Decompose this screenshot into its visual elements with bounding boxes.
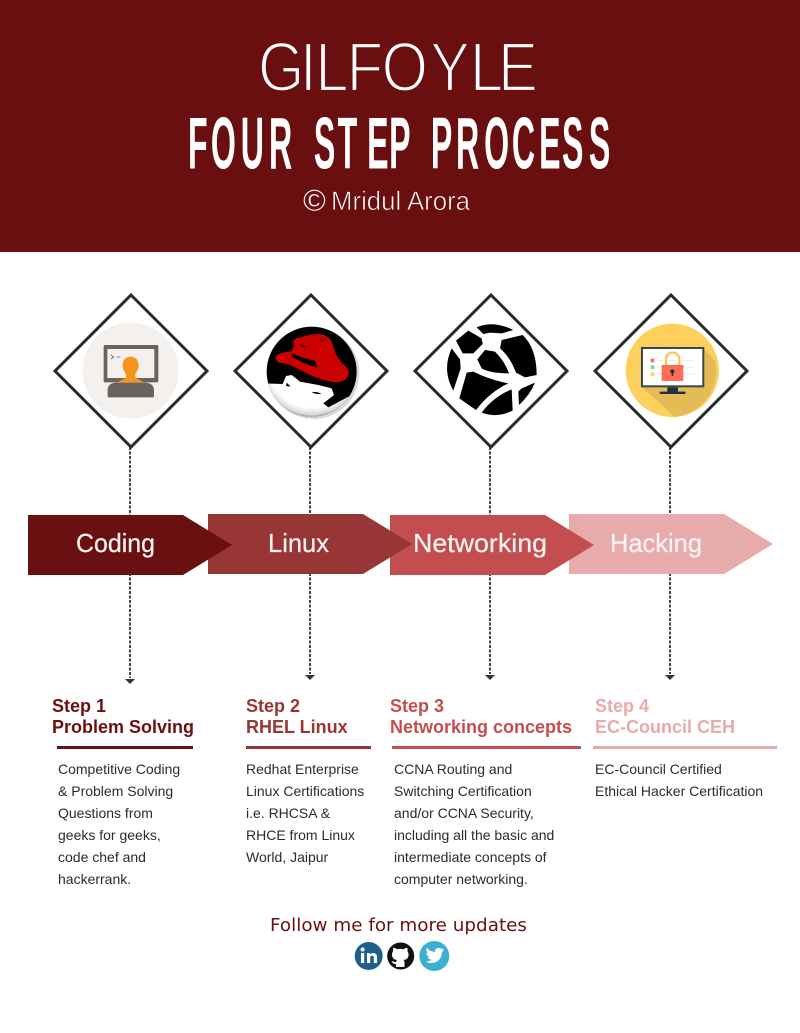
arrow: networking: Networking — [413, 528, 547, 558]
arrow: coding: Coding — [76, 528, 155, 558]
dashed connector lines — [125, 447, 675, 684]
icon: twitter — [419, 941, 449, 971]
heading: step 3: Networking concepts — [390, 717, 572, 737]
icon: programmer at monitor — [83, 323, 179, 419]
diamond: coding — [55, 295, 207, 447]
description: step 1: code chef and — [58, 849, 146, 865]
description: step 4: Ethical Hacker Certification — [595, 783, 763, 799]
heading: step 3: Step 3 — [390, 696, 444, 716]
author credit: Mridul Arora — [331, 186, 471, 216]
description: step 3: including all the basic and — [394, 827, 554, 843]
heading: step 1: Problem Solving — [52, 717, 194, 737]
header banner — [0, 0, 800, 252]
description: step 1: hackerrank. — [58, 871, 131, 887]
description: step 2: i.e. RHCSA & — [246, 805, 331, 821]
icon: red hat logo — [266, 326, 360, 419]
diamond: hacking — [595, 295, 747, 447]
icon: linkedin — [355, 942, 383, 970]
description: step 3: intermediate concepts of — [394, 849, 547, 865]
step 1 column — [52, 696, 194, 887]
footer — [270, 915, 527, 971]
title: Four Step Process: FOUR STEP PROCESS — [188, 102, 610, 184]
description: step 3: and/or CCNA Security, — [394, 805, 534, 821]
arrow: hacking — [569, 514, 773, 574]
description: step 2: World, Jaipur — [246, 849, 329, 865]
description: step 4: EC-Council Certified — [595, 761, 722, 777]
description: step 2: RHCE from Linux — [246, 827, 355, 843]
arrow: linux: Linux — [268, 528, 329, 558]
arrow: networking — [390, 515, 594, 575]
arrow: coding — [28, 515, 232, 575]
heading: step 4: EC-Council CEH — [595, 717, 735, 737]
author credit: © — [303, 183, 326, 218]
icon: padlock on monitor — [626, 324, 719, 417]
heading: step 4: Step 4 — [595, 696, 649, 716]
follow text: Follow me for more updates — [270, 915, 527, 936]
author credit — [303, 183, 471, 218]
step 3 column — [390, 696, 581, 887]
step 2 column — [246, 696, 371, 865]
description: step 1: Competitive Coding — [58, 761, 180, 777]
description: step 3: computer networking. — [394, 871, 528, 887]
title: Gilfoyle: GILFOYLE — [258, 27, 538, 106]
heading: step 2: RHEL Linux — [246, 717, 348, 737]
icon: github — [387, 942, 414, 970]
description: step 2: Redhat Enterprise — [246, 761, 359, 777]
description: step 1: Questions from — [58, 805, 153, 821]
description: step 1: & Problem Solving — [58, 783, 173, 799]
diamond: linux — [235, 295, 387, 447]
description: step 2: Linux Certifications — [246, 783, 364, 799]
step 4 column — [593, 696, 777, 799]
description: step 3: Switching Certification — [394, 783, 532, 799]
description: step 3: CCNA Routing and — [394, 761, 512, 777]
arrow: linux — [208, 514, 412, 574]
diamond: networking — [415, 295, 567, 447]
heading: step 2: Step 2 — [246, 696, 300, 716]
icon: globe network — [447, 324, 537, 415]
description: step 1: geeks for geeks, — [58, 827, 161, 843]
heading: step 1: Step 1 — [52, 696, 106, 716]
arrow: hacking: Hacking — [610, 528, 702, 558]
